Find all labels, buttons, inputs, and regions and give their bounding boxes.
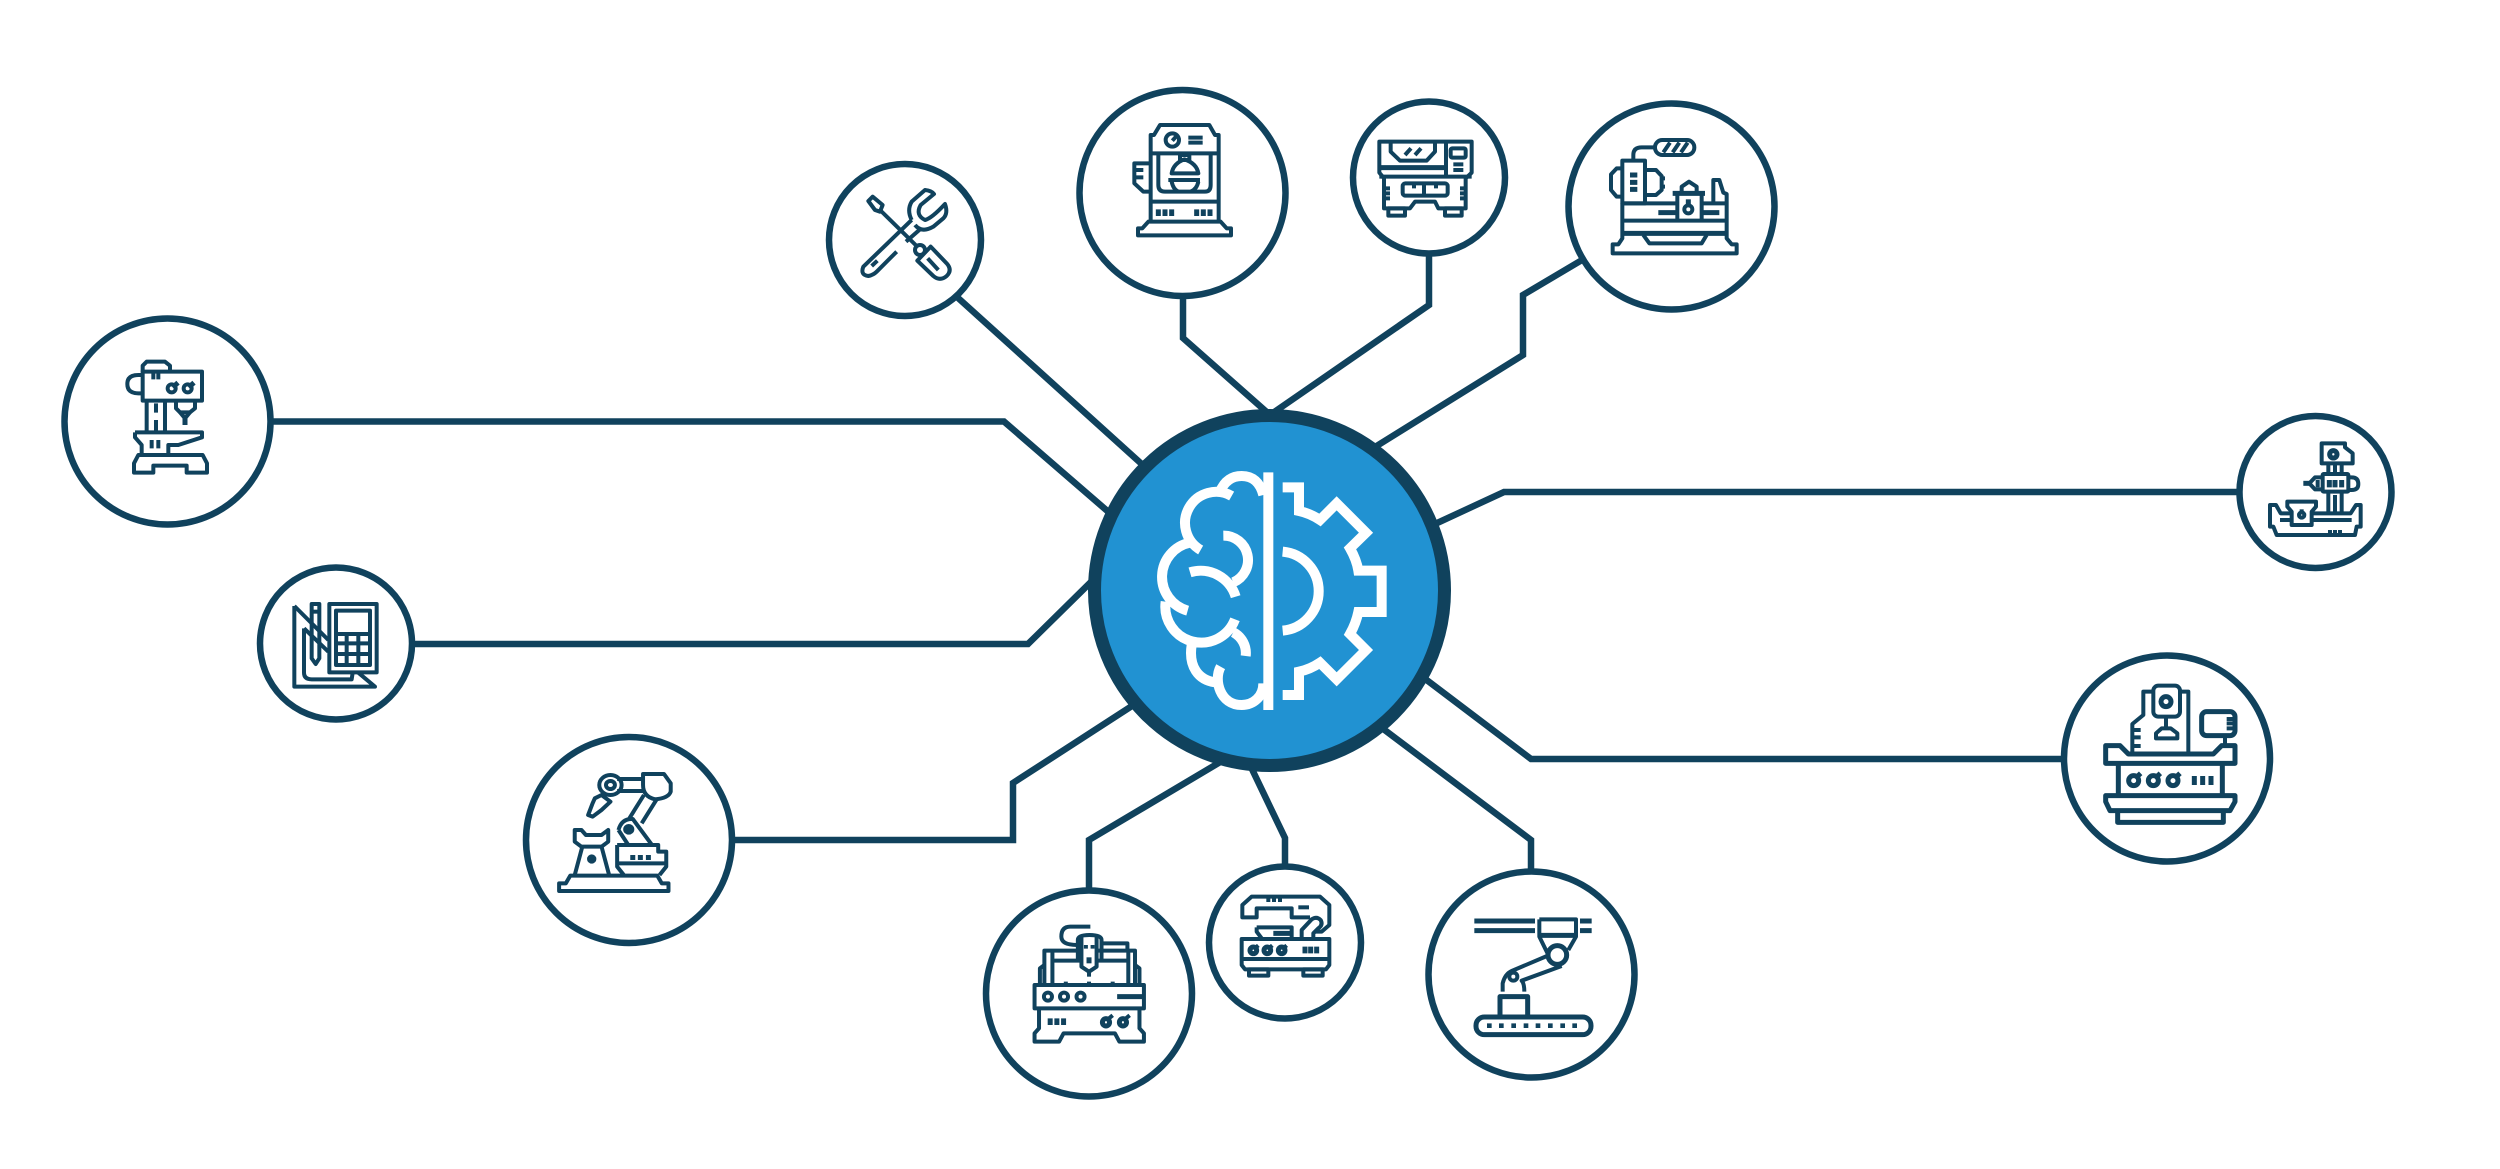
connector: right large machine: [1424, 678, 2065, 759]
connector: drill press: [270, 422, 1112, 515]
icon: hydraulic press: [1134, 125, 1231, 235]
brain lobes: [1162, 476, 1263, 705]
connector: top machine: [1270, 254, 1429, 415]
icon: drill press: [127, 362, 207, 473]
node: robot arm: [526, 737, 732, 943]
connector: tools: [957, 297, 1145, 467]
icon: brain and gear: [1162, 472, 1382, 710]
icon: calculator and set square: [294, 604, 377, 687]
connector: band machine: [1250, 765, 1285, 866]
node: conveyor robot: [1428, 872, 1634, 1078]
gear hub: [1283, 552, 1319, 631]
connector: hydraulic press: [1183, 296, 1270, 415]
node: band machine: [1209, 866, 1361, 1018]
connector: robot arm: [731, 704, 1135, 840]
node: calculator: [260, 568, 412, 720]
icon: robot arm over conveyor: [1474, 919, 1592, 1035]
icon: welding robot arm: [559, 774, 671, 891]
node: right small machine: [2240, 416, 2392, 568]
node: hydraulic press: [1080, 90, 1286, 296]
node: lathe: [1568, 104, 1774, 310]
connector: right small machine: [1435, 492, 2240, 524]
icon: cnc router: [1035, 927, 1144, 1042]
icon: lathe: [1611, 140, 1737, 253]
node: drill press: [64, 318, 270, 524]
icon: enclosed cnc machine: [1379, 142, 1472, 216]
connector: lathe: [1375, 260, 1582, 447]
icon: grinding machine: [2106, 686, 2235, 822]
divider bar: [1253, 472, 1283, 710]
node: tools: [829, 164, 981, 316]
gear half: [1283, 487, 1382, 695]
node: top machine: [1353, 102, 1505, 254]
connector: calculator: [412, 578, 1095, 644]
icon: band machine: [1242, 897, 1329, 976]
central hub: [1094, 416, 1444, 766]
node: cnc router: [986, 890, 1192, 1096]
icon: boring machine: [2270, 443, 2361, 535]
icon: wrench and screwdriver: [862, 190, 950, 279]
connector: cnc router: [1089, 761, 1222, 891]
node: right large machine: [2064, 656, 2270, 862]
connector: conveyor robot: [1382, 728, 1531, 872]
